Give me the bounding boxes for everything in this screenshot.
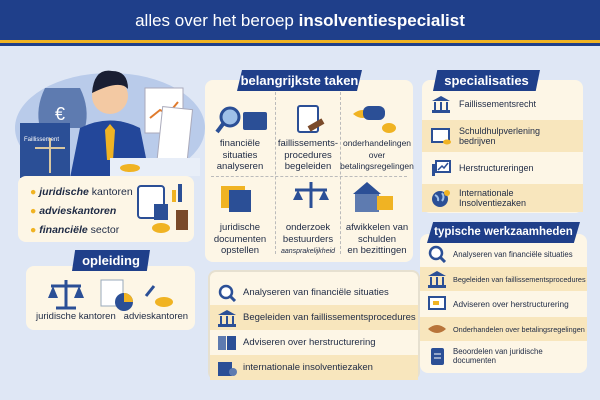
- panel: typische werkzaamheden: documenten: [453, 356, 496, 365]
- heading: belangrijkste taken: belangrijkste taken: [241, 73, 358, 88]
- panel: belangrijkste taken: faillissements-: [278, 138, 338, 149]
- panel: belangrijkste taken: [205, 80, 413, 262]
- panel: belangrijkste taken: documenten: [214, 234, 266, 244]
- panel: activities list: Analyseren van financiële situaties: [243, 287, 389, 298]
- panel: belangrijkste taken: schulden: [358, 234, 396, 244]
- panel: specialisaties: Herstructureringen: [459, 163, 534, 173]
- panel: opleiding: [26, 266, 195, 330]
- panel: typische werkzaamheden: Analyseren van financiële situaties: [453, 250, 573, 258]
- title: alles over het beroep insolventiespecialist: [135, 11, 465, 30]
- panel: belangrijkste taken: situaties: [223, 150, 257, 160]
- heading: typische werkzaamheden: typische werkzaamheden: [434, 226, 573, 238]
- heading: opleiding: [72, 250, 150, 271]
- heading: specialisaties: specialisaties: [444, 73, 529, 88]
- panel: specialisaties: Internationale: [459, 188, 514, 198]
- panel: typische werkzaamheden: Adviseren over herstructurering: [453, 299, 569, 309]
- illustration: specialist at desk: €: [55, 104, 65, 124]
- panel: belangrijkste taken: bestuurders: [283, 234, 333, 244]
- icon: documents and coins: [137, 184, 188, 233]
- panel: activities list: Adviseren over herstructurering: [243, 337, 376, 348]
- panel: activities list: Begeleiden van faillissementsprocedures: [243, 312, 416, 323]
- panel: belangrijkste taken: procedures: [284, 150, 332, 160]
- panel: belangrijkste taken: en bezittingen: [347, 245, 407, 256]
- panel: workplaces list: ● financiële sector: [30, 224, 119, 236]
- panel: workplaces list: ● juridische kantoren: [30, 186, 133, 198]
- panel: typische werkzaamheden: Begeleiden van faillissementsprocedures: [453, 274, 586, 284]
- panel: specialisaties: bedrijven: [459, 136, 496, 146]
- panel: workplaces list: ● advieskantoren: [30, 205, 116, 217]
- panel: belangrijkste taken: opstellen: [221, 245, 259, 256]
- panel: activities list: internationale insolventiezaken: [243, 362, 373, 373]
- panel: workplaces list: [18, 176, 194, 242]
- panel: belangrijkste taken: juridische: [220, 222, 260, 233]
- heading: belangrijkste taken: [237, 70, 362, 91]
- heading: specialisaties: [433, 70, 540, 91]
- panel: typische werkzaamheden: Beoordelen van juridische: [453, 347, 543, 356]
- panel: belangrijkste taken: afwikkelen van: [346, 222, 408, 233]
- panel: specialisaties: [422, 80, 583, 213]
- heading: typische werkzaamheden: [427, 222, 580, 243]
- panel: belangrijkste taken: aansprakelijkheid: [281, 248, 335, 255]
- panel: typische werkzaamheden: [420, 234, 587, 373]
- panel: belangrijkste taken: analyseren: [217, 161, 263, 172]
- illustration: specialist at desk: Faillissement: [24, 137, 59, 143]
- heading: opleiding: opleiding: [82, 253, 140, 268]
- panel: activities list: [208, 270, 420, 380]
- icons: tasks: [216, 105, 396, 212]
- panel: typische werkzaamheden: Onderhandelen over betalingsregelingen: [453, 324, 585, 334]
- panel: specialisaties: Insolventiezaken: [459, 198, 526, 208]
- panel: belangrijkste taken: onderzoek: [286, 222, 330, 233]
- panel: belangrijkste taken: over: [369, 150, 385, 160]
- illustration: specialist at desk: [15, 70, 205, 178]
- header: [0, 0, 600, 46]
- panel: belangrijkste taken: financiële: [220, 138, 260, 149]
- panel: belangrijkste taken: betalingsregelingen: [340, 161, 414, 171]
- panel: belangrijkste taken: onderhandelingen: [343, 138, 411, 148]
- panel: specialisaties: Schuldhulpverlening: [459, 126, 540, 136]
- panel: belangrijkste taken: begeleiden: [285, 161, 331, 172]
- panel: opleiding: juridische kantoren advieskantoren: [36, 311, 188, 322]
- panel: specialisaties: Faillissementsrecht: [459, 99, 536, 109]
